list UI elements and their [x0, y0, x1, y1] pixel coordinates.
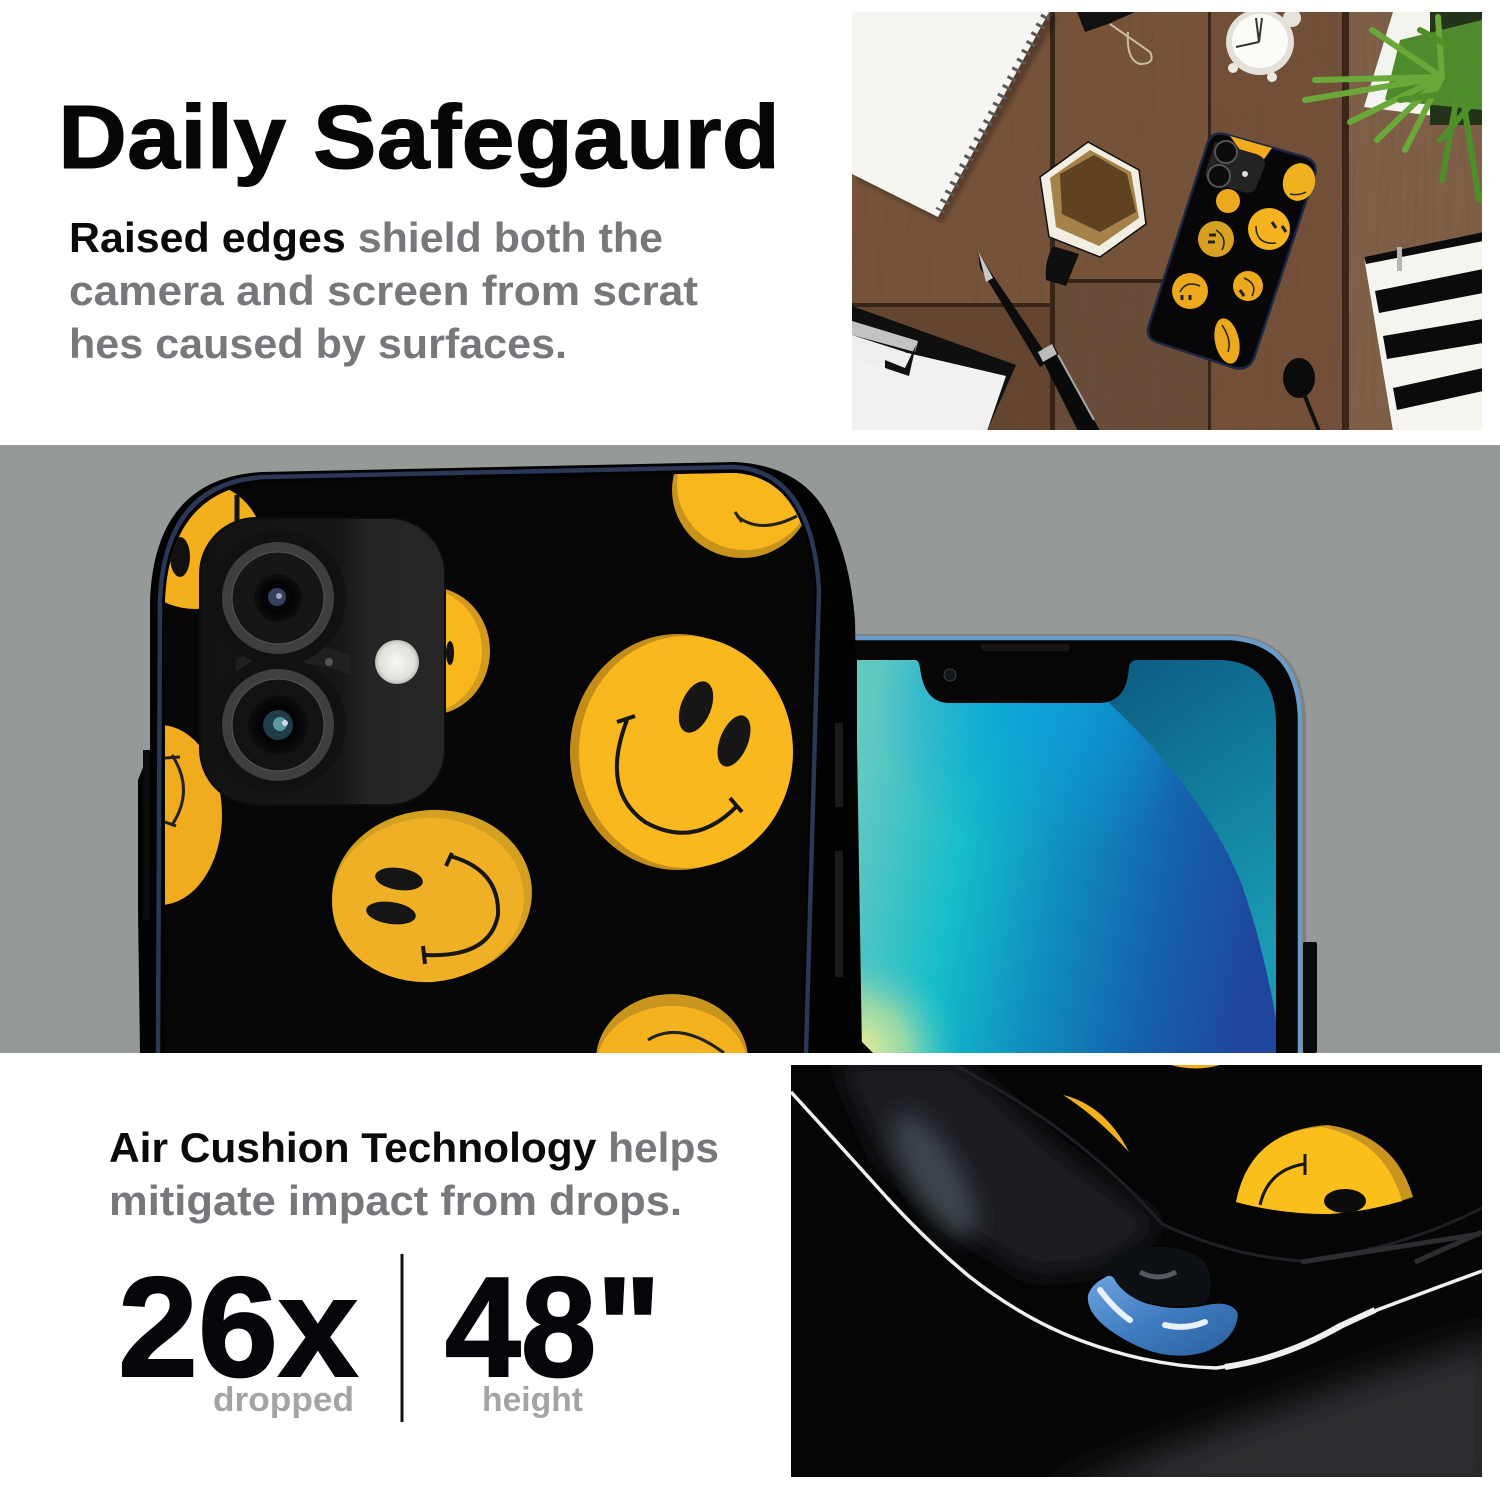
- smiley: behind camera: [446, 589, 490, 712]
- icon: lower lens: [222, 662, 346, 781]
- side buttons: [835, 723, 843, 977]
- smiley: left edge: [165, 725, 222, 905]
- smiley: lower middle: [332, 810, 532, 982]
- case print: smileys: [165, 473, 802, 1053]
- icon: hexagonal coffee mug: [1040, 142, 1146, 286]
- stat: 26x dropped: 26x: [118, 1248, 358, 1407]
- icon: microphone dot: [325, 658, 333, 666]
- text block: raised edges description: hes caused by surfaces.: [69, 320, 567, 367]
- text block: raised edges description: camera and screen from scrat: [69, 267, 698, 314]
- icon: water droplet: [1088, 1247, 1238, 1356]
- icon: clipboard: [852, 306, 1016, 431]
- photo: phone case on wooden desk: [852, 9, 1483, 431]
- text block: raised edges description: [69, 214, 698, 367]
- divider: [400, 1254, 404, 1422]
- icon: earphone: [1283, 358, 1319, 431]
- icon: upper lens: [222, 542, 346, 662]
- icon: spiral notebook: [852, 12, 1057, 223]
- floor reflection: [1068, 1328, 1482, 1477]
- icon: phone with smiley case: [1148, 134, 1319, 369]
- title: Daily Safegaurd: [58, 88, 780, 188]
- case bumper band: [835, 1060, 1482, 1275]
- text block: air cushion description: Air Cushion Technology helps: [109, 1124, 719, 1171]
- stat: 48 inches height: 48": [445, 1248, 661, 1407]
- back phone: [138, 462, 862, 1053]
- icon: flash: [375, 640, 419, 684]
- front phone: [845, 634, 1317, 1055]
- speaker: [981, 644, 1070, 651]
- screen: [850, 655, 1280, 1055]
- icon: binder clip: [1077, 12, 1152, 64]
- text block: air cushion description: [109, 1124, 719, 1224]
- icon: desk clock: [1226, 9, 1301, 82]
- text block: raised edges description: Raised edges shield both the: [69, 214, 663, 261]
- stat: 48 inches height: height: [482, 1381, 583, 1419]
- camera bump: [200, 518, 445, 805]
- text block: air cushion description: mitigate impact from drops.: [109, 1177, 682, 1224]
- smiley: top right: [672, 473, 802, 558]
- smileys inside case: [1063, 1065, 1413, 1214]
- icon: potted plant: [1305, 12, 1482, 200]
- photo: raised edge closeup with droplet: [791, 1060, 1500, 1500]
- white rim highlight: [791, 1092, 1482, 1368]
- icon: pen: [978, 251, 1100, 431]
- smiley: bottom: [596, 994, 748, 1053]
- icon: front camera: [944, 669, 956, 681]
- icon: striped notebook: [1364, 232, 1483, 431]
- smiley: top left: [165, 490, 256, 609]
- smiley: large: [570, 634, 793, 870]
- stat: 26x dropped: dropped: [213, 1381, 354, 1419]
- panel: grey band with phones: [0, 445, 1500, 1053]
